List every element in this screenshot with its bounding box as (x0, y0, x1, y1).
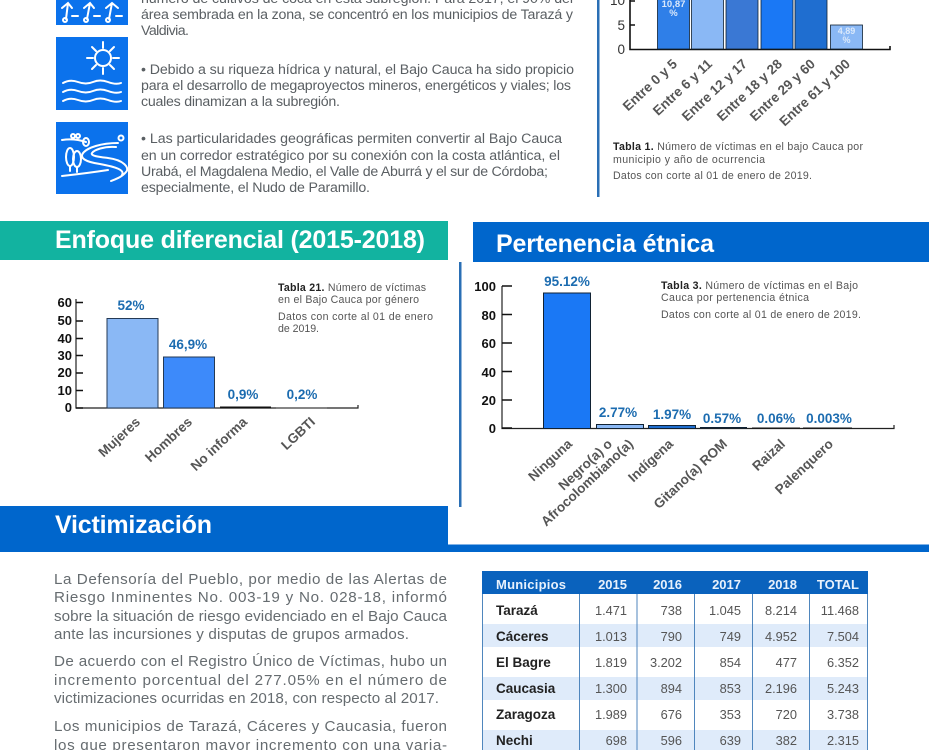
caption: table 21: Datos con corte al 01 de enero (278, 311, 433, 323)
table: victims by municipality and year: Tarazá (496, 603, 538, 618)
bar chart: victims by gender: Hombres (142, 414, 195, 465)
table: victims by municipality and year: 790 (661, 629, 682, 644)
bar chart: victims by gender: No informa (188, 414, 250, 474)
caption: table 3 (661, 280, 861, 321)
heading: Victimización: Victimización (55, 511, 212, 539)
caption: table 21: Tabla 21. Número de víctimas (278, 282, 426, 294)
bar chart: victims by age: 5 (617, 18, 625, 33)
text: water resources: cuales dinamizan a la subregión. (141, 94, 340, 110)
caption: table 3: Datos con corte al 01 de enero de 2019. (661, 309, 861, 321)
bar chart: victims by ethnicity: Negro(a) o (555, 436, 615, 493)
bar chart: victims by gender: 40 (58, 331, 72, 346)
bar chart: victims by ethnicity: 1.97% (653, 407, 691, 422)
icon: sun and water (56, 37, 128, 110)
table: victims by municipality and year: 854 (720, 655, 741, 670)
bar chart: victims by ethnicity: 40 (482, 365, 496, 380)
bar chart: victims by ethnicity: Indígena (625, 436, 676, 485)
bar chart: victims by ethnicity: 0 (489, 421, 496, 436)
text: water resources: • Debido a su riqueza hídrica y natural, el Bajo Cauca ha sido propicio (141, 62, 574, 78)
table: victims by municipality and year: Nechi (496, 733, 533, 748)
table: victims by municipality and year: 2.196 (765, 681, 797, 696)
text: strategic corridor: especialmente, el Nudo de Paramillo. (141, 180, 370, 196)
bar chart: victims by gender: 60 (58, 295, 72, 310)
bar chart: victims by age: Entre 18 y 28 (714, 56, 785, 124)
bar chart: victims by ethnicity: Ninguna (525, 436, 575, 484)
caption: table 21: de 2019. (278, 323, 319, 335)
table: victims by municipality and year: 1.300 (595, 681, 627, 696)
table: victims by municipality and year: 8.214 (765, 603, 797, 618)
bar chart: victims by gender: 0 (65, 400, 72, 415)
table: victims by municipality and year: 7.504 (827, 629, 859, 644)
bar chart: victims by ethnicity: 0.06% (757, 411, 795, 426)
text: victimización body: victimizaciones ocurridas en 2018, con respecto al 2017. (54, 690, 439, 707)
bar chart: victims by ethnicity: 0.003% (806, 411, 852, 426)
table header: Municipios (496, 577, 566, 592)
bar chart: victims by gender (58, 295, 358, 474)
caption: table 3: Tabla 3. Número de víctimas en el Bajo (661, 280, 858, 292)
text: coca crops: Valdivia. (141, 23, 189, 39)
table: victims by municipality and year: 1.471 (595, 603, 627, 618)
bar chart: victims by gender: 10 (58, 383, 72, 398)
heading: Victimización (0, 506, 929, 552)
table header: 2017 (712, 577, 741, 592)
table: victims by municipality and year: 4.952 (765, 629, 797, 644)
table: victims by municipality and year: 6.352 (827, 655, 859, 670)
bar chart: victims by ethnicity: 100 (474, 279, 496, 294)
bar chart: victims by gender: 30 (58, 348, 72, 363)
bar chart: victims by ethnicity: Gitano(a) ROM (651, 436, 730, 512)
divider line between charts (459, 262, 462, 507)
table: victims by municipality and year: 853 (720, 681, 741, 696)
bar chart: victims by ethnicity: 95.12% (544, 274, 590, 289)
bar chart: victims by age: Entre 0 y 5 (620, 56, 680, 114)
table: victims by municipality and year: Caucasia (496, 681, 556, 696)
table: victims by municipality and year: 596 (661, 733, 682, 748)
bar chart: victims by ethnicity: 2.77% (599, 405, 637, 420)
table: victims by municipality and year: 3.738 (827, 707, 859, 722)
bar chart: victims by ethnicity (474, 274, 894, 529)
table: victims by municipality and year: 11.468 (821, 603, 859, 618)
table: victims by municipality and year: 749 (720, 629, 741, 644)
bar chart: victims by age: 4,89 (838, 26, 855, 36)
text: victimización body: ante las incursiones y disputas de grupos armados. (54, 626, 409, 643)
table: victims by municipality and year: 353 (720, 707, 741, 722)
text: strategic corridor: • Las particularidades geográficas permiten convertir al Bajo Cauca (141, 131, 562, 147)
table: victims by municipality and year: 3.202 (650, 655, 682, 670)
table: victims by municipality and year: 1.989 (595, 707, 627, 722)
table: victims by municipality and year: Zaragoza (496, 707, 556, 722)
caption: table 21: en el Bajo Cauca por género (278, 294, 419, 306)
caption: table 1: municipio y año de ocurrencia (613, 154, 765, 166)
text: victimización body: La Defensoría del Pueblo, por medio de las Alertas de (54, 571, 447, 588)
bar chart: victims by ethnicity: Raizal (749, 436, 788, 474)
table header (482, 571, 868, 594)
bar chart: victims by gender: LGBTI (278, 414, 318, 453)
bar chart: victims by ethnicity: 0.57% (703, 411, 741, 426)
caption: table 1 (613, 141, 863, 182)
bar chart: victims by age (610, 0, 890, 129)
heading: Enfoque diferencial (0, 221, 448, 260)
text: victimización body: incremento porcentual del 277.05% en el número de (54, 672, 447, 689)
bar chart: victims by age: Entre 29 y 60 (747, 56, 818, 124)
text: victimización body: Riesgo Inminentes No. 003-19 y No. 028-18, informó (54, 589, 447, 606)
bar chart: victims by ethnicity: 60 (482, 336, 496, 351)
table: victims by municipality and year: 676 (661, 707, 682, 722)
bar chart: victims by ethnicity: 20 (482, 393, 496, 408)
icon: coca plants (56, 0, 128, 25)
table: victims by municipality and year: 2.315 (827, 733, 859, 748)
bar chart: victims by ethnicity: 80 (482, 308, 496, 323)
bar chart: victims by gender: 46,9% (169, 337, 207, 352)
text: strategic corridor (141, 131, 562, 196)
table: victims by municipality and year: 720 (776, 707, 797, 722)
caption: table 1: Tabla 1. Número de víctimas en el bajo Cauca por (613, 141, 863, 153)
table: victims by municipality and year: 1.045 (709, 603, 741, 618)
table: victims by municipality and year: 738 (661, 603, 682, 618)
table: victims by municipality and year: El Bagre (496, 655, 551, 670)
table header: 2016 (653, 577, 682, 592)
caption: table 1: Datos con corte al 01 de enero de 2019. (613, 170, 812, 182)
table: victims by municipality and year: 698 (606, 733, 627, 748)
heading: Pertenencia étnica: Pertenencia étnica (496, 230, 715, 258)
table: victims by municipality and year: 477 (776, 655, 797, 670)
bar chart: victims by age: Entre 61 y 100 (776, 56, 853, 129)
table header: 2018 (768, 577, 797, 592)
bar chart: victims by gender: 0,2% (287, 387, 317, 402)
heading: Enfoque diferencial: Enfoque diferencial (2015-2018) (55, 226, 425, 254)
table: victims by municipality and year: 5.243 (827, 681, 859, 696)
bar chart: victims by gender: 52% (117, 298, 145, 313)
text: coca crops (141, 0, 574, 39)
table header: TOTAL (817, 577, 859, 592)
bar chart: victims by age: % (842, 35, 851, 45)
icon: river and trees (56, 122, 128, 194)
bar chart: victims by gender: 0,9% (228, 387, 258, 402)
text: coca crops: área sembrada en la zona, se concentró en los municipios de Tarazá y (141, 7, 574, 23)
bar chart: victims by age: % (669, 8, 678, 19)
text: strategic corridor: Urabá, el Magdalena Medio, el Valle de Aburrá y el sur de Córdoba; (141, 164, 548, 180)
table: victims by municipality and year: Cáceres (496, 629, 549, 644)
text: strategic corridor: en un corredor estratégico por su conexión con la costa atlántica, el (141, 148, 560, 164)
table header: 2015 (598, 577, 627, 592)
bar chart: victims by age: 0 (617, 42, 625, 57)
table: victims by municipality and year: 894 (661, 681, 682, 696)
bar chart: victims by age: Entre 12 y 17 (679, 56, 750, 124)
caption: table 3: Cauca por pertenencia étnica (661, 292, 809, 304)
text: victimización body: sobre la situación de riesgo evidenciado en el Bajo Cauca (54, 608, 448, 625)
table: victims by municipality and year: 639 (720, 733, 741, 748)
table: victims by municipality and year: 1.013 (595, 629, 627, 644)
divider line right of key facts (597, 0, 600, 197)
table: victims by municipality and year: 1.819 (595, 655, 627, 670)
heading: Pertenencia étnica (473, 222, 929, 262)
text: victimización body (54, 571, 448, 750)
bar chart: victims by ethnicity: Afrocolombiano(a) (538, 436, 636, 529)
table: victims by municipality and year: 382 (776, 733, 797, 748)
bar chart: victims by gender: 50 (58, 313, 72, 328)
bar chart: victims by gender: 20 (58, 365, 72, 380)
bar chart: victims by ethnicity: Palenquero (772, 436, 836, 497)
bar chart: victims by gender: Mujeres (95, 414, 143, 460)
bar chart: victims by age: Entre 6 y 11 (650, 56, 715, 118)
text: victimización body: Los municipios de Tarazá, Cáceres y Caucasia, fueron (54, 718, 447, 735)
table: victims by municipality and year (482, 571, 868, 750)
caption: table 21 (278, 282, 433, 335)
text: victimización body: De acuerdo con el Registro Único de Víctimas, hubo un (54, 653, 447, 670)
panel: key facts (56, 0, 574, 196)
text: water resources: para el desarrollo de megaproyectos mineros, energéticos y viales; los (141, 78, 571, 94)
text: water resources (141, 62, 574, 110)
